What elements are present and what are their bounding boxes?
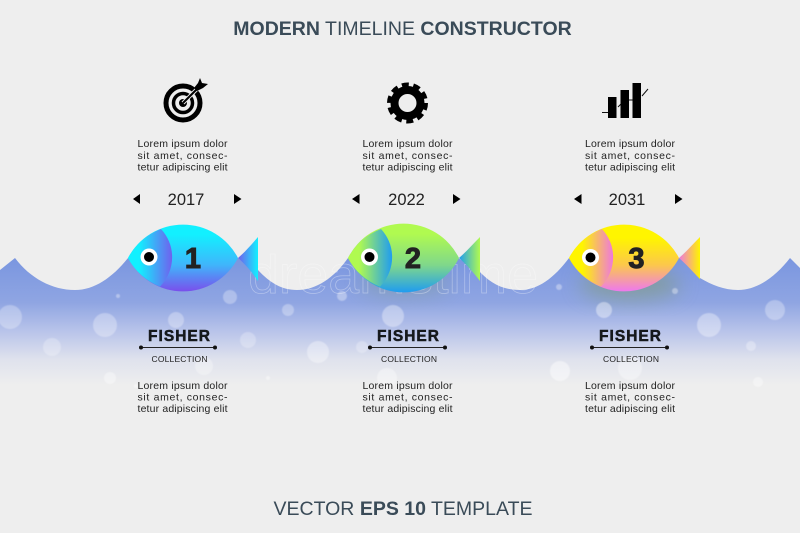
year selector 2031: 2031 xyxy=(609,191,645,209)
text block: bottom 2: sit amet, consec- xyxy=(362,392,453,404)
fisher label 2 xyxy=(368,328,447,364)
text block: bottom 1: Lorem ipsum dolor xyxy=(138,380,228,392)
tail xyxy=(238,237,258,281)
eye xyxy=(582,249,599,266)
fisher label 3 xyxy=(590,328,669,364)
fisher label 2: FISHER xyxy=(377,328,439,345)
body xyxy=(348,224,459,292)
text block: bottom 2: Lorem ipsum dolor xyxy=(362,380,453,392)
body xyxy=(569,225,679,291)
year selector 2031 xyxy=(574,191,682,209)
text block: bottom 1 xyxy=(138,380,228,415)
text block: bottom 3 xyxy=(585,380,676,415)
fish 1 xyxy=(128,225,258,291)
text block: top 1: sit amet, consec- xyxy=(138,150,228,162)
number: 1 xyxy=(185,243,201,275)
fisher label 1: COLLECTION xyxy=(152,354,208,364)
eye xyxy=(140,248,158,266)
tail xyxy=(679,237,700,279)
bubbles xyxy=(0,284,785,388)
text block: top 2: sit amet, consec- xyxy=(362,150,453,162)
water waves xyxy=(0,258,800,386)
text block: bottom 3: tetur adipiscing elit xyxy=(585,403,675,415)
watermark: dreamstime xyxy=(248,245,538,305)
text block: top 3: Lorem ipsum dolor xyxy=(585,138,676,150)
number: 2 xyxy=(405,243,421,275)
text block: top 3: sit amet, consec- xyxy=(585,150,676,162)
text block: bottom 1: sit amet, consec- xyxy=(138,392,228,404)
text block: bottom 2: tetur adipiscing elit xyxy=(362,403,453,415)
text block: top 3 xyxy=(585,138,676,174)
icon: bar chart xyxy=(602,83,648,118)
body xyxy=(128,225,238,291)
tail xyxy=(459,237,480,281)
fisher label 3: COLLECTION xyxy=(603,354,659,364)
fish 3 xyxy=(569,225,700,291)
eye xyxy=(361,248,378,266)
text block: top 1: Lorem ipsum dolor xyxy=(138,138,228,150)
year selector 2017: 2017 xyxy=(168,191,204,209)
text block: bottom 2 xyxy=(362,380,453,415)
text block: top 2: Lorem ipsum dolor xyxy=(362,138,453,150)
text block: top 3: tetur adipiscing elit xyxy=(585,162,675,174)
fish 2 xyxy=(348,224,480,292)
text block: bottom 1: tetur adipiscing elit xyxy=(138,403,228,415)
fisher label 1: FISHER xyxy=(148,328,210,345)
icon: gear xyxy=(389,84,426,122)
year selector 2022 xyxy=(352,191,460,209)
year selector 2022: 2022 xyxy=(388,191,425,209)
year selector 2017 xyxy=(133,191,242,209)
head xyxy=(128,229,172,287)
number: 3 xyxy=(628,243,645,275)
text block: top 2: tetur adipiscing elit xyxy=(362,162,453,174)
head xyxy=(348,229,392,287)
title: MODERN TIMELINE CONSTRUCTOR xyxy=(233,18,572,40)
text block: bottom 3: Lorem ipsum dolor xyxy=(585,380,676,392)
icon: target xyxy=(166,78,208,120)
fisher label 1 xyxy=(139,328,217,364)
text block: top 1: tetur adipiscing elit xyxy=(138,162,228,174)
fisher label 3: FISHER xyxy=(599,328,661,345)
footer: VECTOR EPS 10 TEMPLATE xyxy=(273,498,533,520)
text block: bottom 3: sit amet, consec- xyxy=(585,392,676,404)
head xyxy=(569,229,613,287)
text block: top 2 xyxy=(362,138,453,174)
fish shadows xyxy=(360,268,680,300)
text block: top 1 xyxy=(138,138,228,174)
fisher label 2: COLLECTION xyxy=(381,354,437,364)
